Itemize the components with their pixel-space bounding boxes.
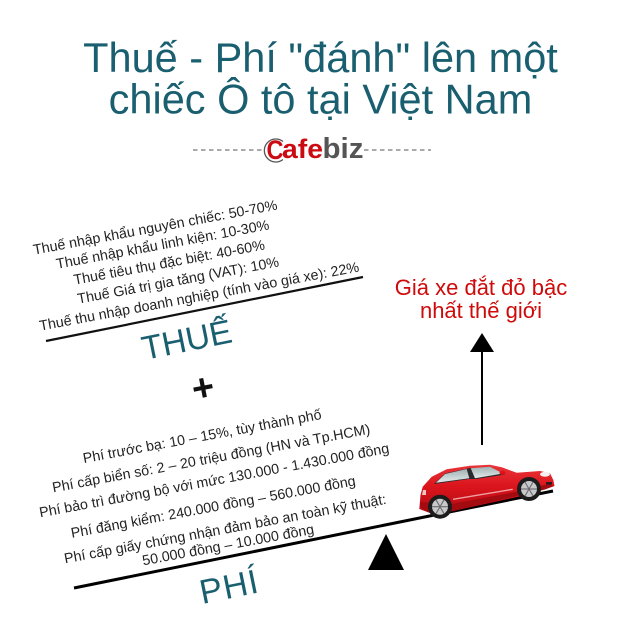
tax list: Thuế Giá trị gia tăng (VAT): 10% [76,254,281,308]
fee list: Phí bảo trì đường bộ với mức 130.000 - 1.430.000 đồng [38,441,390,521]
fee list: Phí cấp biển số: 2 – 20 triệu đồng (HN và Tp.HCM) [51,422,371,496]
fee list: 50.000 đồng – 10.000 đồng [141,522,315,569]
icon: red car [419,465,554,519]
plus sign: + [188,366,218,411]
title: Thuế - Phí "đánh" lên một [83,34,558,81]
logo: CafeBiz: biz [322,133,364,165]
heading: PHÍ: PHÍ [196,563,262,612]
tax list [32,198,361,335]
fee list [38,407,390,569]
red label: Giá xe đắt đỏ bậc [395,275,567,300]
logo: CafeBiz [193,133,431,165]
heading: THUẾ: THUẾ [138,313,235,368]
fee list: Phí trước bạ: 10 – 15%, tùy thành phố [82,407,323,467]
up arrow [470,333,494,445]
red label [395,275,567,323]
tax list: Thuế nhập khẩu linh kiện: 10-30% [55,217,271,273]
fulcrum triangle [368,534,404,570]
tax list: Thuế nhập khẩu nguyên chiếc: 50-70% [32,198,279,259]
title [83,34,558,122]
tax list: Thuế tiêu thụ đặc biệt: 40-60% [72,237,266,289]
fee list: Phí đăng kiểm: 240.000 đồng – 560.000 đồng [70,473,357,542]
logo: CafeBiz: C [266,135,284,165]
tax list: Thuế thu nhập doanh nghiệp (tính vào giá xe): 22% [38,260,361,335]
balance beam [74,491,553,588]
fee list: Phí cấp giấy chứng nhận đảm bảo an toàn kỹ thuật: [63,492,388,567]
logo: CafeBiz: afe [282,134,323,164]
title: chiếc Ô tô tại Việt Nam [109,76,532,122]
red label: nhất thế giới [420,298,542,323]
tax divider line [46,277,363,341]
